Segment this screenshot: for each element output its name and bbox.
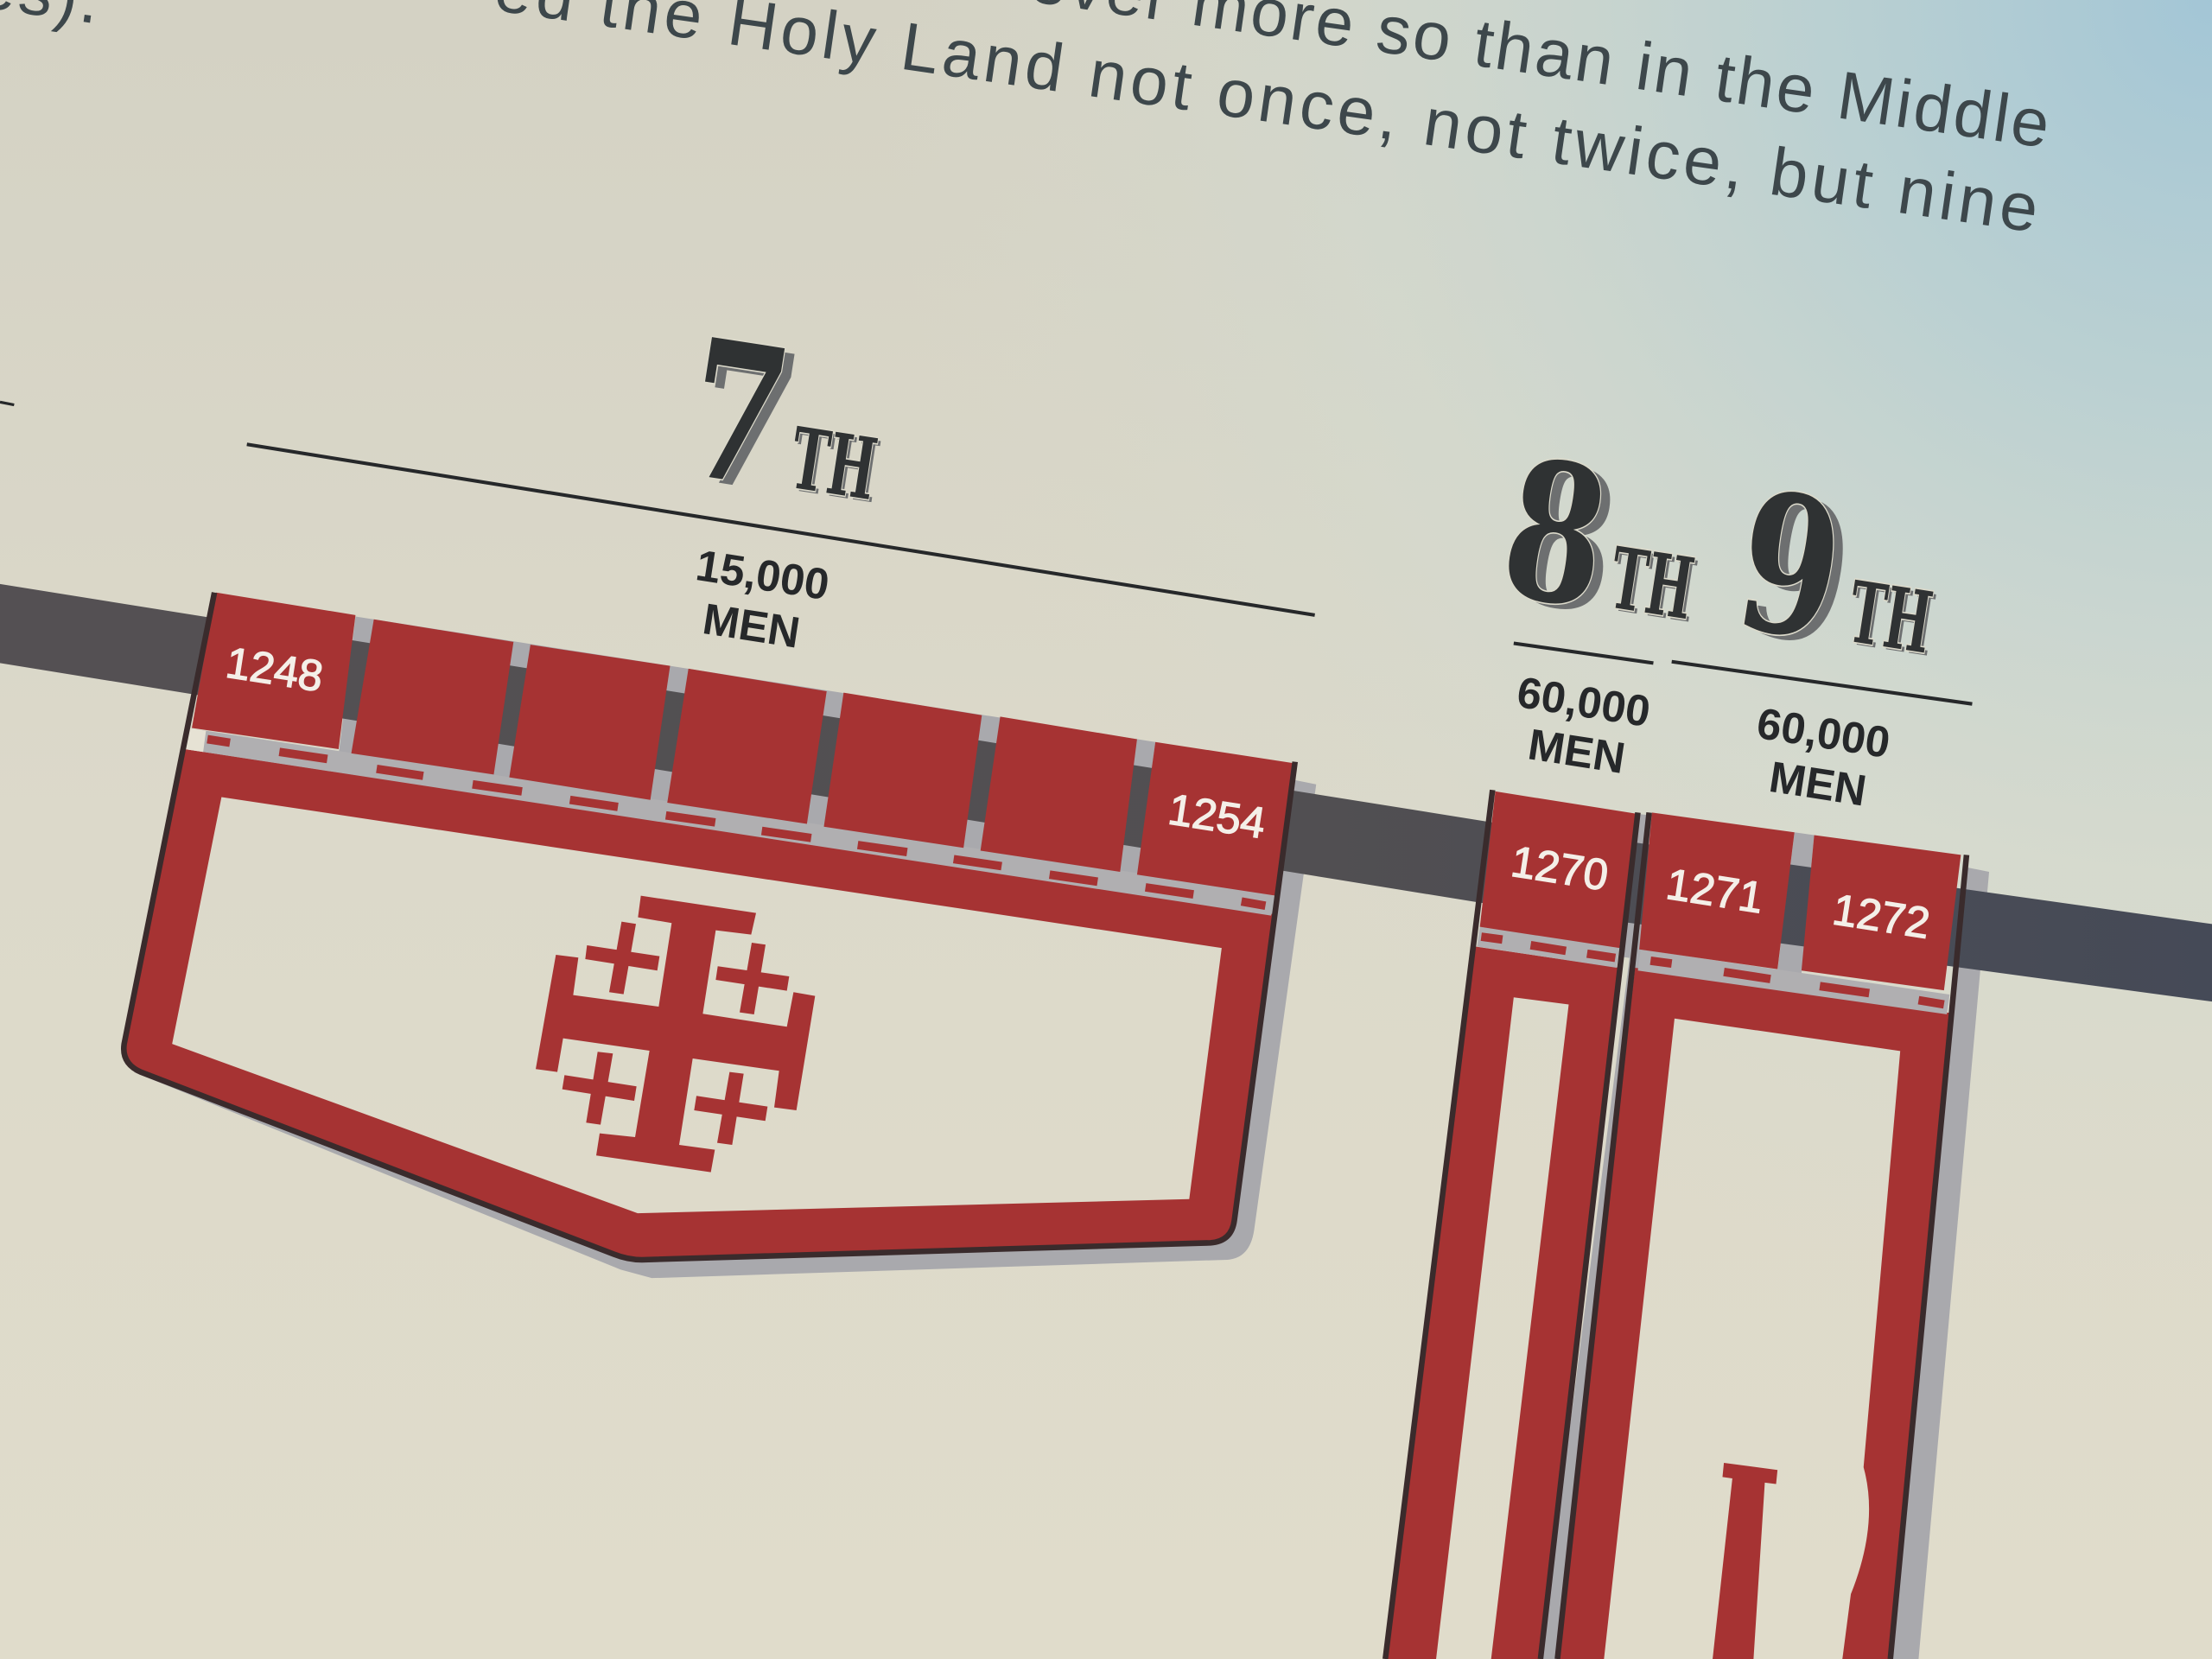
7th crusade outline xyxy=(124,593,1295,1260)
rule under 8th xyxy=(1514,643,1653,663)
year label 1248: 1248 xyxy=(223,638,327,701)
heading: 8th: 8 xyxy=(1490,416,1622,652)
label: 15,000 men xyxy=(693,540,833,658)
8th crusade outline xyxy=(1385,790,1638,1659)
8th crusade frame xyxy=(1385,947,1619,1659)
9th crusade dashed strip xyxy=(1638,950,1949,1014)
label: 9th 60,000 men xyxy=(1754,698,1893,816)
year label 1270: 1270 xyxy=(1508,836,1611,900)
year label 1271: 1271 xyxy=(1663,859,1767,923)
rule stub at left edge xyxy=(0,402,14,405)
heading: 7th: 7 xyxy=(683,302,812,537)
heading: 9th: 9 xyxy=(1734,454,1866,690)
heading: 9th: TH xyxy=(1845,566,1941,677)
label: 9th 60,000 men: MEN xyxy=(1766,752,1870,816)
year label 1272: 1272 xyxy=(1829,884,1933,948)
label: 8th 60,000 men xyxy=(1514,667,1654,783)
9th crusade dashes xyxy=(1650,961,1944,1004)
9th crusade frame xyxy=(1557,968,1949,1659)
label: 15,000 men: MEN xyxy=(700,594,804,658)
7th crusade dashed strip xyxy=(185,728,1277,916)
8th crusade dashed strip xyxy=(1477,927,1619,968)
heading: 8th: 8 xyxy=(1500,422,1631,658)
9th crusade year blocks xyxy=(1639,812,1961,990)
rule under 7th xyxy=(247,444,1315,615)
panel: 8th crusade xyxy=(1385,790,1638,1659)
heading: 7th: 7 xyxy=(673,296,802,531)
label: 8th 60,000 men: 60,000 xyxy=(1514,667,1654,736)
timeline band xyxy=(0,584,2212,1001)
icon: partial sword xyxy=(1713,1463,1777,1659)
7th crusade dashes xyxy=(207,740,1265,906)
panel: 9th crusade xyxy=(1557,812,1967,1659)
7th crusade year blocks xyxy=(192,593,1294,896)
heading: 9th: 9 xyxy=(1724,448,1856,684)
8th crusade dashes xyxy=(1481,937,1615,958)
panel: 7th crusade xyxy=(124,593,1295,1260)
label: 8th 60,000 men: MEN xyxy=(1525,719,1629,783)
heading: 7th: TH xyxy=(787,412,886,523)
heading: 8th: TH xyxy=(1604,529,1700,639)
drop shadows of crusade frames xyxy=(134,616,1989,1659)
rule under 9th xyxy=(1672,662,1972,704)
heading: 7th: TH xyxy=(784,409,883,520)
icon: Jerusalem cross xyxy=(536,896,815,1173)
label: 15,000 men: 15,000 xyxy=(693,540,833,609)
7th crusade frame xyxy=(124,749,1274,1260)
heading: 9th: TH xyxy=(1842,563,1938,673)
7th crusade strip pale end xyxy=(185,728,206,752)
9th crusade outline xyxy=(1557,812,1967,1659)
year label 1254: 1254 xyxy=(1165,785,1268,848)
heading: 8th: TH xyxy=(1606,531,1702,643)
8th crusade year block xyxy=(1480,791,1638,948)
label: 9th 60,000 men: 60,000 xyxy=(1754,698,1893,767)
